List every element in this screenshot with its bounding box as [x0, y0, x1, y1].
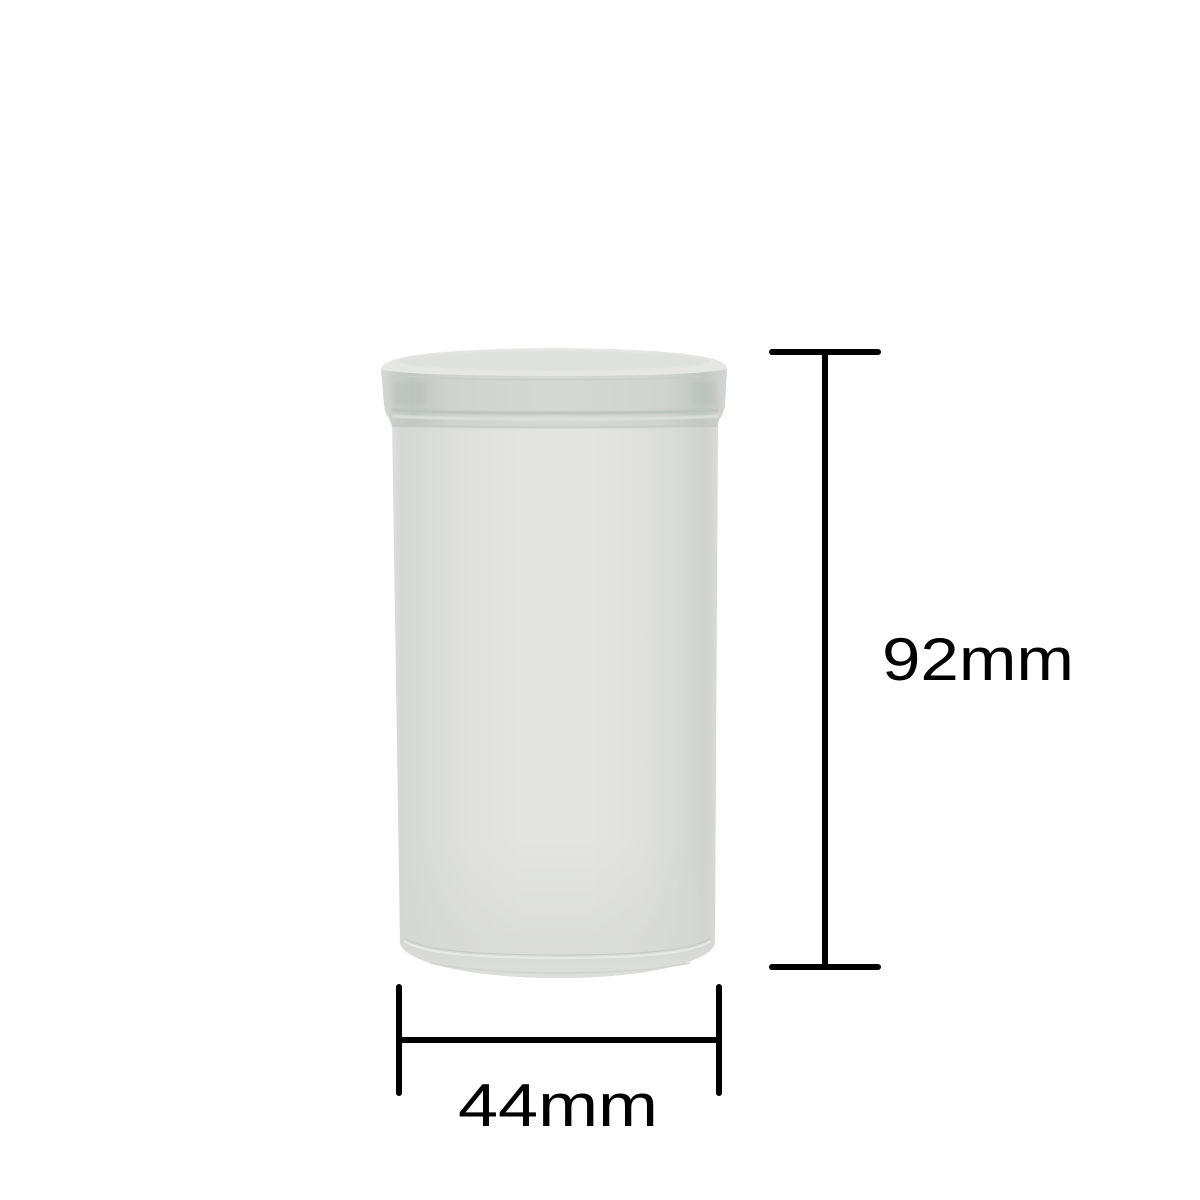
width label: 44mm	[458, 1072, 658, 1139]
lid band shadow patches	[394, 382, 716, 405]
container: frosted pop-top vial	[381, 348, 727, 978]
snap lid band	[381, 369, 727, 427]
height label: 92mm	[882, 626, 1074, 693]
vial base rim	[400, 938, 715, 978]
height dimension bracket	[772, 352, 878, 967]
width dimension bracket	[399, 987, 719, 1093]
lid top	[381, 348, 727, 376]
lid band grooves	[392, 410, 718, 427]
vial body	[392, 420, 718, 978]
